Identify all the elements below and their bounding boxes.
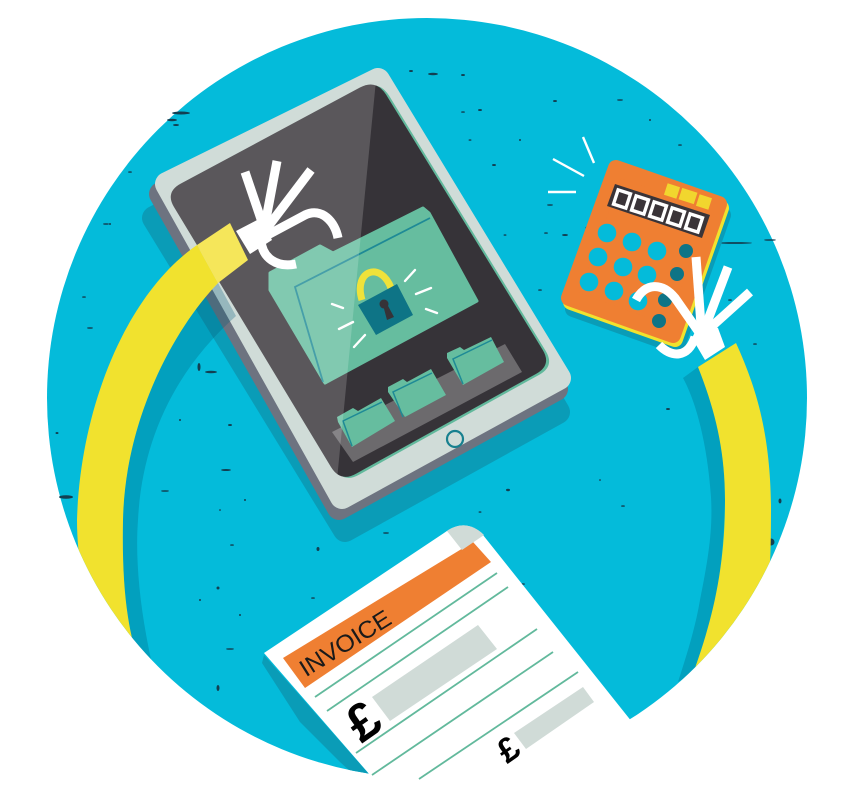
left frayed wires xyxy=(236,161,338,265)
tablet side edge xyxy=(161,90,556,508)
screen reflection xyxy=(170,84,376,474)
calculator display xyxy=(607,184,710,238)
calculator body xyxy=(569,168,719,335)
calculator side xyxy=(571,172,721,339)
pound sign small: £ xyxy=(490,729,527,771)
panel: tablet xyxy=(140,70,559,508)
calculator buttons xyxy=(580,224,666,310)
left arm shadow xyxy=(123,283,236,664)
folder tray xyxy=(332,344,522,462)
tablet green screen edge xyxy=(174,85,549,478)
padlock xyxy=(358,272,413,335)
invoice shadow xyxy=(262,655,369,774)
grey amount bar 2 xyxy=(514,687,594,749)
calculator xyxy=(569,168,721,339)
invoice lines xyxy=(315,573,578,779)
invoice paper xyxy=(264,525,640,798)
yellow keys xyxy=(664,183,712,210)
calculator shadow xyxy=(573,179,723,346)
calculator rays xyxy=(548,137,594,192)
right frayed wires xyxy=(636,257,750,360)
left arm xyxy=(77,223,248,664)
tablet screen xyxy=(171,84,546,477)
right arm xyxy=(678,343,771,682)
grey amount bar 1 xyxy=(372,625,497,721)
left cuff xyxy=(197,223,248,283)
invoice title: INVOICE xyxy=(295,605,396,683)
pound sign large: £ xyxy=(335,690,392,754)
left sleeve xyxy=(77,245,218,642)
home button xyxy=(447,431,463,447)
large folder xyxy=(270,208,477,383)
small folder 3 xyxy=(447,337,504,385)
dark calculator buttons xyxy=(652,244,693,328)
small folder 1 xyxy=(337,398,395,447)
invoice header band xyxy=(283,542,491,688)
lock rays xyxy=(332,270,437,347)
display digits xyxy=(614,190,702,232)
panel: invoice xyxy=(264,525,640,798)
right arm shadow xyxy=(678,367,725,682)
tablet face xyxy=(167,80,559,497)
speckle texture xyxy=(56,70,782,691)
right sleeve xyxy=(695,343,771,680)
page fold xyxy=(447,525,484,550)
small folder 2 xyxy=(388,369,446,417)
tablet shadow xyxy=(154,100,558,530)
